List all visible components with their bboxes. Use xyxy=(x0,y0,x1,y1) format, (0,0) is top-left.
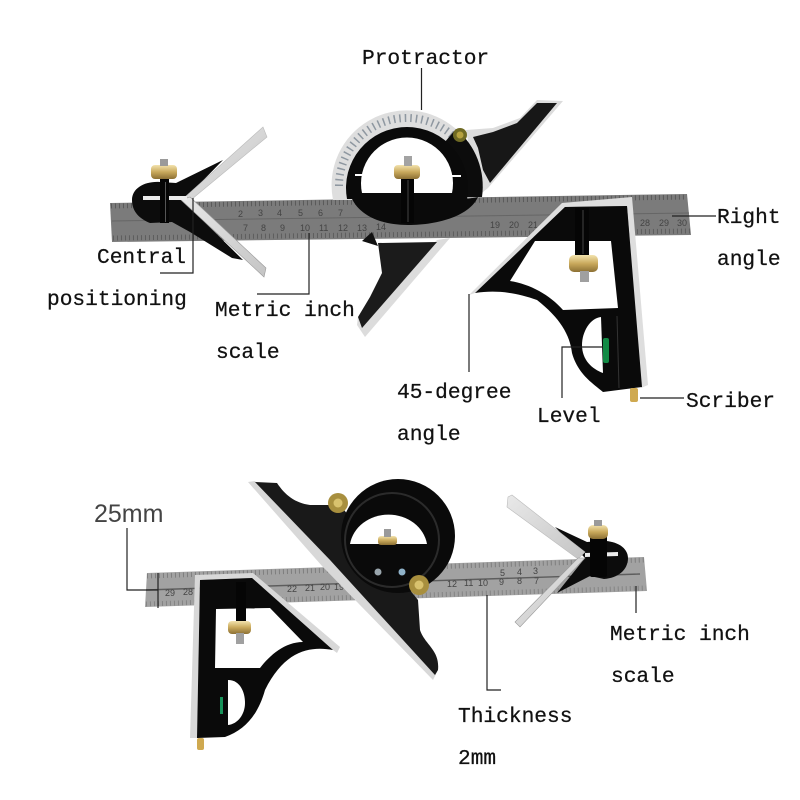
center bar xyxy=(143,196,187,200)
black body xyxy=(197,578,333,738)
post xyxy=(590,535,607,577)
label: Level: Level xyxy=(537,405,601,429)
label: 45-degree angle: 45-degree xyxy=(397,381,511,405)
brass screws xyxy=(328,493,348,513)
head body xyxy=(555,527,628,593)
top ruler: 30 xyxy=(677,218,687,228)
black body xyxy=(255,482,438,675)
bottom ruler: 19 xyxy=(334,582,344,592)
center bar xyxy=(585,552,618,557)
post xyxy=(575,208,589,256)
top ruler: 4 xyxy=(277,208,282,218)
label: Metric inch scale bottom: Metric inch xyxy=(610,623,750,647)
black right sector xyxy=(407,129,483,197)
top ruler: 21 xyxy=(528,220,538,230)
label: Scriber: Scriber xyxy=(686,390,775,414)
top ruler: 2 xyxy=(238,209,243,219)
top ruler: 7 xyxy=(243,223,248,233)
combination square, top xyxy=(469,197,648,402)
callout line: scriber xyxy=(640,397,684,399)
bottom ruler: 4 xyxy=(517,567,522,577)
label: Central positioning: Central xyxy=(97,246,186,270)
brass screw xyxy=(453,128,467,142)
level hole xyxy=(582,317,603,373)
callout line: 45-degree angle xyxy=(468,294,470,372)
label: 45-degree angle: angle xyxy=(397,423,461,447)
black ring xyxy=(346,127,478,225)
level tube highlight xyxy=(617,316,619,388)
center head, top xyxy=(132,127,267,277)
top ruler: 10 xyxy=(300,223,310,233)
label: Thickness 2mm: 2mm xyxy=(458,747,496,771)
top ruler: 6 xyxy=(318,208,323,218)
bottom ruler: 9 xyxy=(499,577,504,587)
knob post xyxy=(401,177,414,223)
silver frame xyxy=(190,573,340,738)
label: Metric inch scale: scale xyxy=(216,341,280,365)
silver edge lower xyxy=(357,238,450,337)
level hole xyxy=(228,680,245,725)
scriber xyxy=(197,738,204,750)
top ruler xyxy=(110,194,691,242)
bottom ruler: 3 xyxy=(533,566,538,576)
blade upper xyxy=(185,127,267,199)
top ruler: 3 xyxy=(258,208,263,218)
blade lower xyxy=(181,197,266,277)
silver frame xyxy=(469,197,648,388)
callout line: thickness xyxy=(487,595,501,690)
bottom ruler: 12 xyxy=(447,579,457,589)
knob xyxy=(588,525,608,539)
top ruler: 12 xyxy=(338,223,348,233)
top ruler: 11 xyxy=(319,223,328,233)
bottom ruler: 21 xyxy=(305,583,315,593)
blade lower xyxy=(515,558,585,627)
bottom ruler: 29 xyxy=(165,588,175,598)
knob xyxy=(228,621,251,634)
ring xyxy=(341,479,455,593)
silver edge upper xyxy=(466,100,563,196)
knob xyxy=(151,165,177,179)
top ruler: 19 xyxy=(490,220,500,230)
bottom ruler: 7 xyxy=(534,576,539,586)
combination square, bottom xyxy=(190,573,340,750)
label: Metric inch scale: Metric inch xyxy=(215,299,355,323)
callout line: level xyxy=(562,347,603,398)
bottom ruler: 22 xyxy=(287,584,297,594)
handle upper xyxy=(473,103,557,183)
callout line: metric inch scale xyxy=(257,233,309,294)
callout line: 25mm xyxy=(127,528,158,608)
bottom ruler: 11 xyxy=(464,578,473,588)
top ruler: 20 xyxy=(509,220,519,230)
center head, bottom xyxy=(507,495,628,627)
label: Metric inch scale bottom: scale xyxy=(611,665,675,689)
level slots xyxy=(355,174,365,176)
head body xyxy=(132,160,243,260)
protractor head, top xyxy=(332,100,563,337)
black body xyxy=(475,206,642,392)
label: 25mm: 25mm xyxy=(94,500,163,528)
bottom ruler xyxy=(145,557,647,607)
top ruler: 28 xyxy=(640,218,650,228)
small screws xyxy=(374,568,382,576)
bottom ruler: 10 xyxy=(478,578,488,588)
top ruler: 5 xyxy=(298,208,303,218)
callout line: metric inch scale bottom xyxy=(635,586,637,613)
protractor head, bottom xyxy=(248,479,455,680)
top ruler: 8 xyxy=(261,223,266,233)
label: Right angle: angle xyxy=(717,248,781,272)
callout line: central positioning xyxy=(160,198,193,273)
level vial xyxy=(603,338,609,363)
bottom ruler: 20 xyxy=(320,582,330,592)
bottom ruler: 28 xyxy=(183,587,193,597)
scriber xyxy=(630,388,638,402)
callout line: right angle xyxy=(672,215,716,217)
top ruler: 9 xyxy=(280,223,285,233)
top ruler: 7 xyxy=(338,208,343,218)
knob xyxy=(378,536,397,545)
window xyxy=(361,137,453,193)
window xyxy=(350,515,427,544)
clamp post xyxy=(160,177,169,223)
callout line: protractor xyxy=(420,68,422,110)
label: Right angle: Right xyxy=(717,206,781,230)
blade upper xyxy=(507,495,585,559)
post xyxy=(236,582,246,622)
scale ring xyxy=(332,110,456,200)
level green xyxy=(220,697,223,714)
handle lower xyxy=(358,242,437,328)
silver edge xyxy=(248,481,437,680)
label: Central positioning: positioning xyxy=(47,288,187,312)
top ruler: 13 xyxy=(357,223,367,233)
knob xyxy=(569,255,598,272)
label: Thickness 2mm: Thickness xyxy=(458,705,572,729)
top ruler: 14 xyxy=(376,222,386,232)
bottom ruler: 8 xyxy=(517,576,522,586)
bottom ruler: 5 xyxy=(500,568,505,578)
top ruler: 29 xyxy=(659,218,669,228)
label: Protractor: Protractor xyxy=(362,47,489,71)
